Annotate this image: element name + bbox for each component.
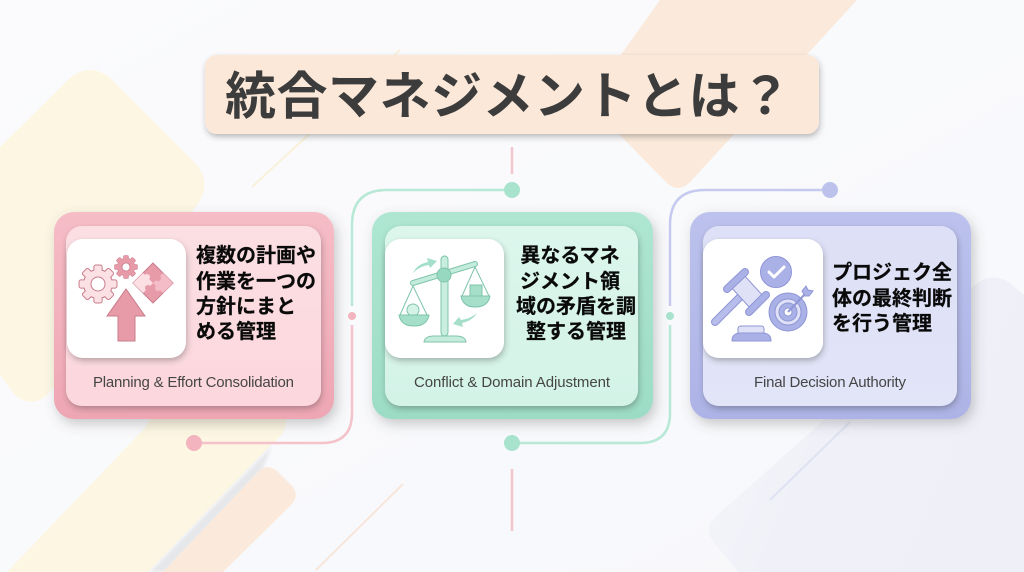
description xyxy=(832,261,952,335)
description xyxy=(516,244,636,343)
description: プロジェク全 xyxy=(832,261,952,284)
icon: gavel, check and target xyxy=(715,256,813,341)
caption: Planning & Effort Consolidation xyxy=(93,374,294,391)
panel: planning and effort consolidation xyxy=(54,212,334,419)
icon: balance scale xyxy=(399,256,490,342)
description: ジメント領 xyxy=(520,270,620,293)
caption: Final Decision Authority xyxy=(754,374,906,391)
description: 域の矛盾を調 xyxy=(516,295,636,318)
description: を行う管理 xyxy=(832,312,932,335)
description: 作業を一つの xyxy=(196,270,316,293)
connector: teal line and nodes xyxy=(352,182,674,451)
title banner xyxy=(205,55,819,134)
description xyxy=(196,244,316,343)
connector: pink line and nodes xyxy=(186,312,356,451)
icon: gears, puzzle and arrow xyxy=(80,256,173,341)
connector: lavender line and node xyxy=(670,182,838,306)
connector: bottom pink stem xyxy=(511,469,513,531)
connector: top pink stem xyxy=(511,147,513,174)
description: める管理 xyxy=(196,320,276,343)
description: 体の最終判断 xyxy=(832,287,952,310)
caption: Conflict & Domain Adjustment xyxy=(414,374,611,391)
panel: final decision authority xyxy=(690,212,971,419)
description: 方針にまと xyxy=(196,295,296,318)
description: 複数の計画や xyxy=(196,244,316,267)
panel: conflict and domain adjustment xyxy=(372,212,653,419)
title: 統合マネジメントとは？ xyxy=(225,68,791,125)
description: 異なるマネ xyxy=(520,244,620,267)
description: 整する管理 xyxy=(526,320,626,343)
